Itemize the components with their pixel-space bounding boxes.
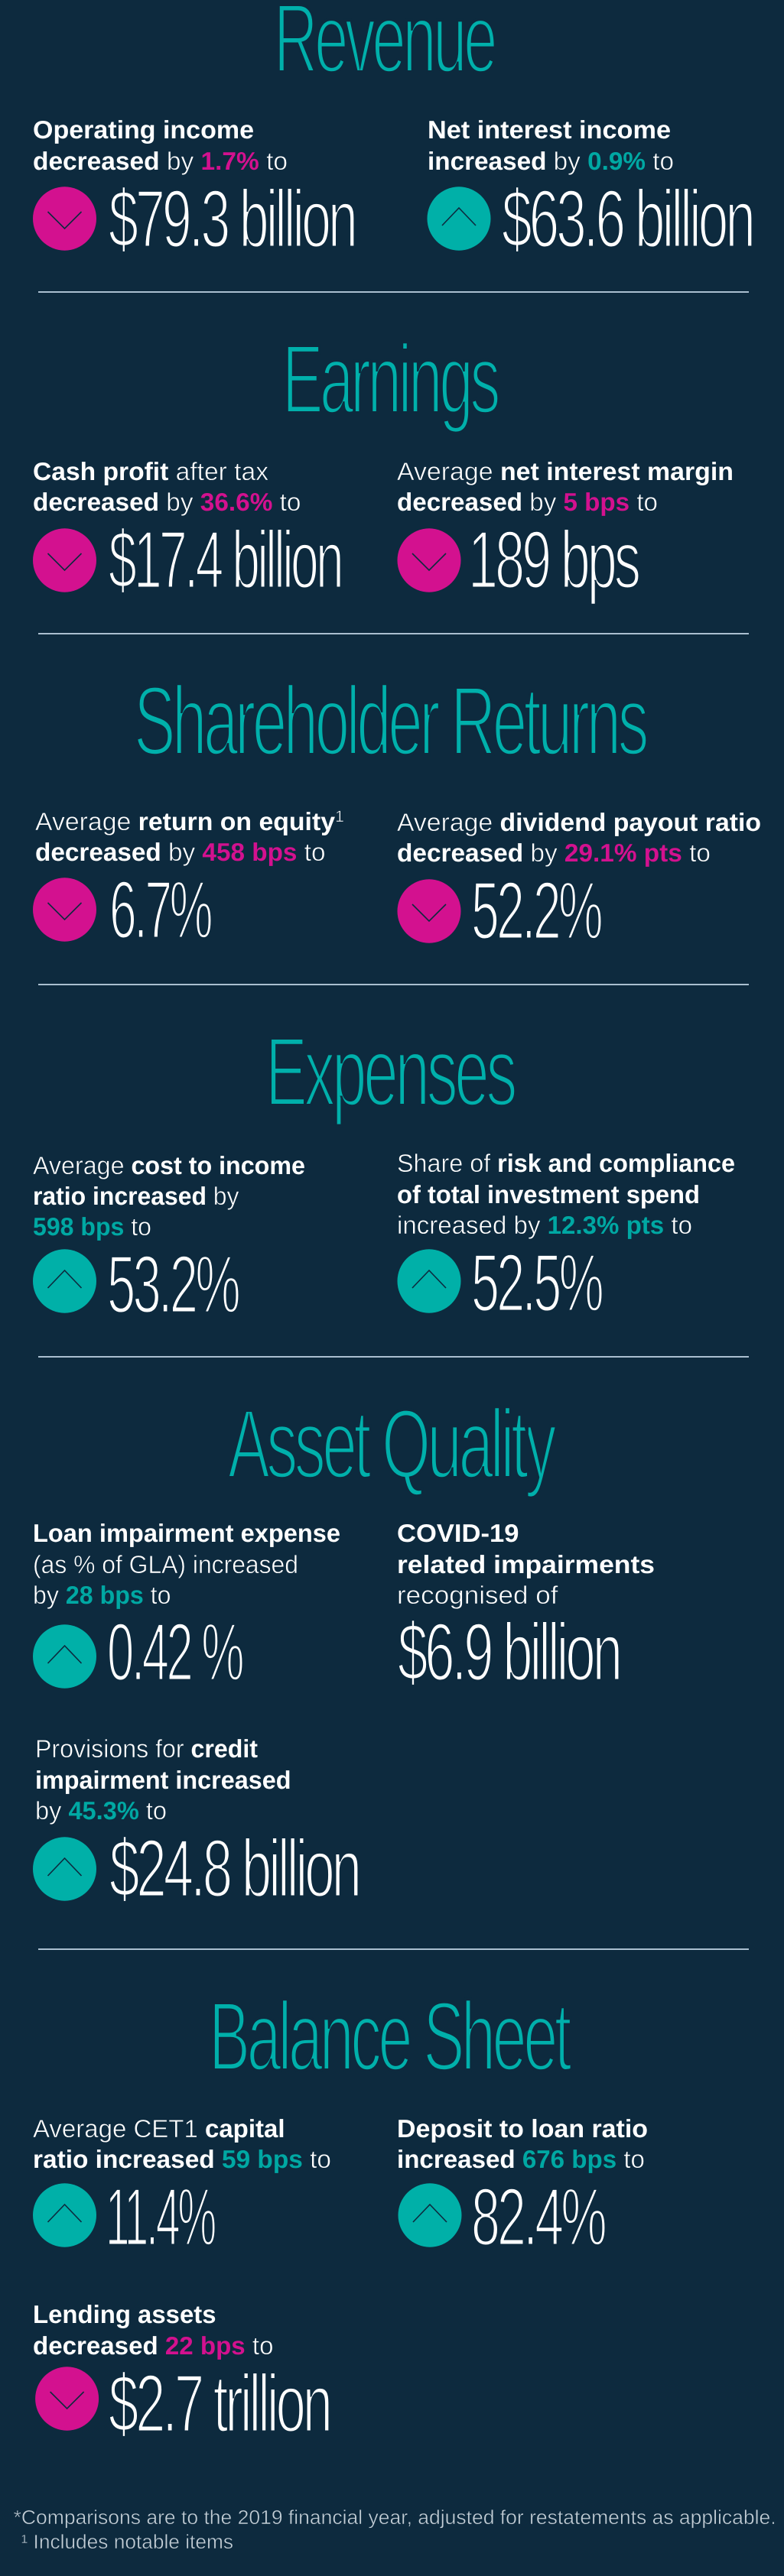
icon: up arrow [33, 1837, 96, 1901]
metric: risk and compliance spend [397, 1149, 735, 1329]
metric: cost to income ratio [33, 1151, 305, 1330]
text: net interest income: Net interest income [428, 115, 671, 144]
text: cash profit: Cash profit after tax [33, 457, 269, 485]
heading: expenses: Expenses [265, 1017, 516, 1127]
text: return on equity [35, 807, 344, 866]
icon: up arrow [33, 1624, 96, 1689]
icon: down arrow [33, 878, 96, 942]
text: lending assets: Lending assets [33, 2300, 216, 2328]
panel: revenue [33, 0, 753, 264]
text: risk and compliance spend: increased by 12.3% pts to [397, 1211, 692, 1239]
heading: earnings: Earnings [282, 325, 499, 434]
value: 52.5%: 52.5% [471, 1237, 603, 1329]
text: covid-19 impairments [397, 1519, 655, 1609]
text: lending assets: decreased 22 bps to [33, 2331, 274, 2360]
icon: up arrow [427, 187, 491, 251]
text: operating income: decreased by 1.7% to [33, 147, 288, 175]
text: operating income [33, 115, 288, 175]
value: 11.4%: 11.4% [106, 2171, 216, 2263]
text: net interest margin [397, 457, 734, 516]
text: loan impairment expense: (as % of GLA) increased [33, 1550, 298, 1578]
panel: balance sheet [33, 1982, 648, 2449]
text: deposit to loan ratio: Deposit to loan ratio [397, 2114, 648, 2143]
value: $17.4 billion: $17.4 billion [109, 514, 341, 605]
icon: down arrow [33, 528, 96, 592]
text: net interest income: increased by 0.9% to [428, 147, 674, 175]
icon: down arrow [398, 528, 460, 592]
text: cost to income ratio [33, 1151, 305, 1241]
text: cost to income ratio: 598 bps to [33, 1212, 151, 1241]
text: operating income: Operating income [33, 115, 254, 144]
text: net interest margin: Average net interest margin [397, 457, 734, 485]
value: 6.7%: 6.7% [109, 864, 212, 955]
text: return on equity: decreased by 458 bps to [35, 838, 326, 866]
text: net interest income [428, 115, 674, 175]
text: loan impairment expense [33, 1519, 340, 1609]
metric: covid-19 impairments [397, 1519, 655, 1698]
metric: net interest income [427, 115, 753, 264]
text: deposit to loan ratio: increased 676 bps to [397, 2145, 645, 2173]
text: credit impairment provisions: Provisions for credit [35, 1734, 258, 1763]
panel: expenses [33, 1017, 735, 1330]
text: loan impairment expense: Loan impairment expense [33, 1519, 340, 1547]
metric: deposit to loan ratio [397, 2114, 648, 2263]
text: dividend payout ratio: decreased by 29.1% pts to [397, 839, 711, 867]
heading: balance sheet: Balance Sheet [209, 1982, 571, 2091]
heading: asset quality: Asset Quality [228, 1390, 556, 1499]
panel: earnings [33, 325, 734, 605]
text: dividend payout ratio [397, 808, 761, 867]
icon: up arrow [398, 2183, 462, 2247]
text: deposit to loan ratio [397, 2114, 648, 2173]
metric: dividend payout ratio [397, 808, 761, 956]
text: covid-19 impairments: related impairments [397, 1550, 655, 1578]
text: credit impairment provisions: by 45.3% to [35, 1796, 167, 1825]
text: return on equity: Average return on equity [35, 807, 330, 835]
metric: return on equity [33, 807, 344, 955]
icon: down arrow [35, 2367, 99, 2431]
footnotes: *Comparisons are to the 2019 financial year, adjusted for restatements as applicable. [14, 2506, 776, 2529]
text: cost to income ratio: ratio increased by [33, 1182, 239, 1210]
text: cash profit: decreased by 36.6% to [33, 488, 301, 516]
text: credit impairment provisions [35, 1734, 291, 1825]
icon: up arrow [33, 1249, 96, 1313]
text: covid-19 impairments: COVID-19 [397, 1519, 519, 1547]
text: net interest margin: decreased by 5 bps to [397, 488, 658, 516]
text: return on equity: 1 [335, 808, 344, 826]
text: cost to income ratio: Average cost to income [33, 1151, 305, 1179]
metric: operating income [33, 115, 355, 264]
value: $79.3 billion: $79.3 billion [109, 173, 355, 264]
metric: cet1 capital ratio [33, 2114, 331, 2263]
icon: down arrow [33, 187, 96, 251]
metric: cash profit [33, 457, 341, 605]
icon: up arrow [398, 1249, 460, 1313]
icon: down arrow [398, 879, 460, 943]
metric: net interest margin [397, 457, 734, 605]
panel: shareholder returns [33, 667, 761, 956]
value: $24.8 billion: $24.8 billion [109, 1822, 359, 1914]
text: risk and compliance spend: of total investment spend [397, 1180, 700, 1209]
text: cet1 capital ratio: ratio increased 59 bps to [33, 2145, 331, 2173]
value: 53.2%: 53.2% [107, 1238, 239, 1330]
text: risk and compliance spend: Share of risk and compliance [397, 1149, 735, 1177]
text: covid-19 impairments: recognised of [397, 1581, 558, 1609]
icon: up arrow [33, 2183, 96, 2247]
text: risk and compliance spend [397, 1149, 735, 1239]
text: cash profit [33, 457, 301, 516]
metric: loan impairment expense [33, 1519, 340, 1698]
text: cet1 capital ratio [33, 2114, 331, 2173]
footnotes [14, 2506, 776, 2553]
text: credit impairment provisions: impairment increased [35, 1766, 291, 1794]
footnotes: ¹ Includes notable items [21, 2530, 233, 2553]
metric: lending assets [33, 2300, 330, 2449]
value: $6.9 billion: $6.9 billion [398, 1606, 620, 1698]
text: dividend payout ratio: Average dividend payout ratio [397, 808, 761, 836]
value: 52.2%: 52.2% [471, 865, 602, 956]
text: cet1 capital ratio: Average CET1 capital [33, 2114, 285, 2143]
value: 189 bps: 189 bps [468, 514, 639, 605]
text: lending assets [33, 2300, 274, 2360]
panel: asset quality [33, 1390, 655, 1914]
value: 82.4%: 82.4% [471, 2171, 606, 2263]
text: loan impairment expense: by 28 bps to [33, 1581, 171, 1609]
value: 0.42 %: 0.42 % [107, 1606, 243, 1698]
metric: credit impairment provisions [33, 1734, 359, 1914]
value: $2.7 trillion: $2.7 trillion [109, 2357, 330, 2449]
